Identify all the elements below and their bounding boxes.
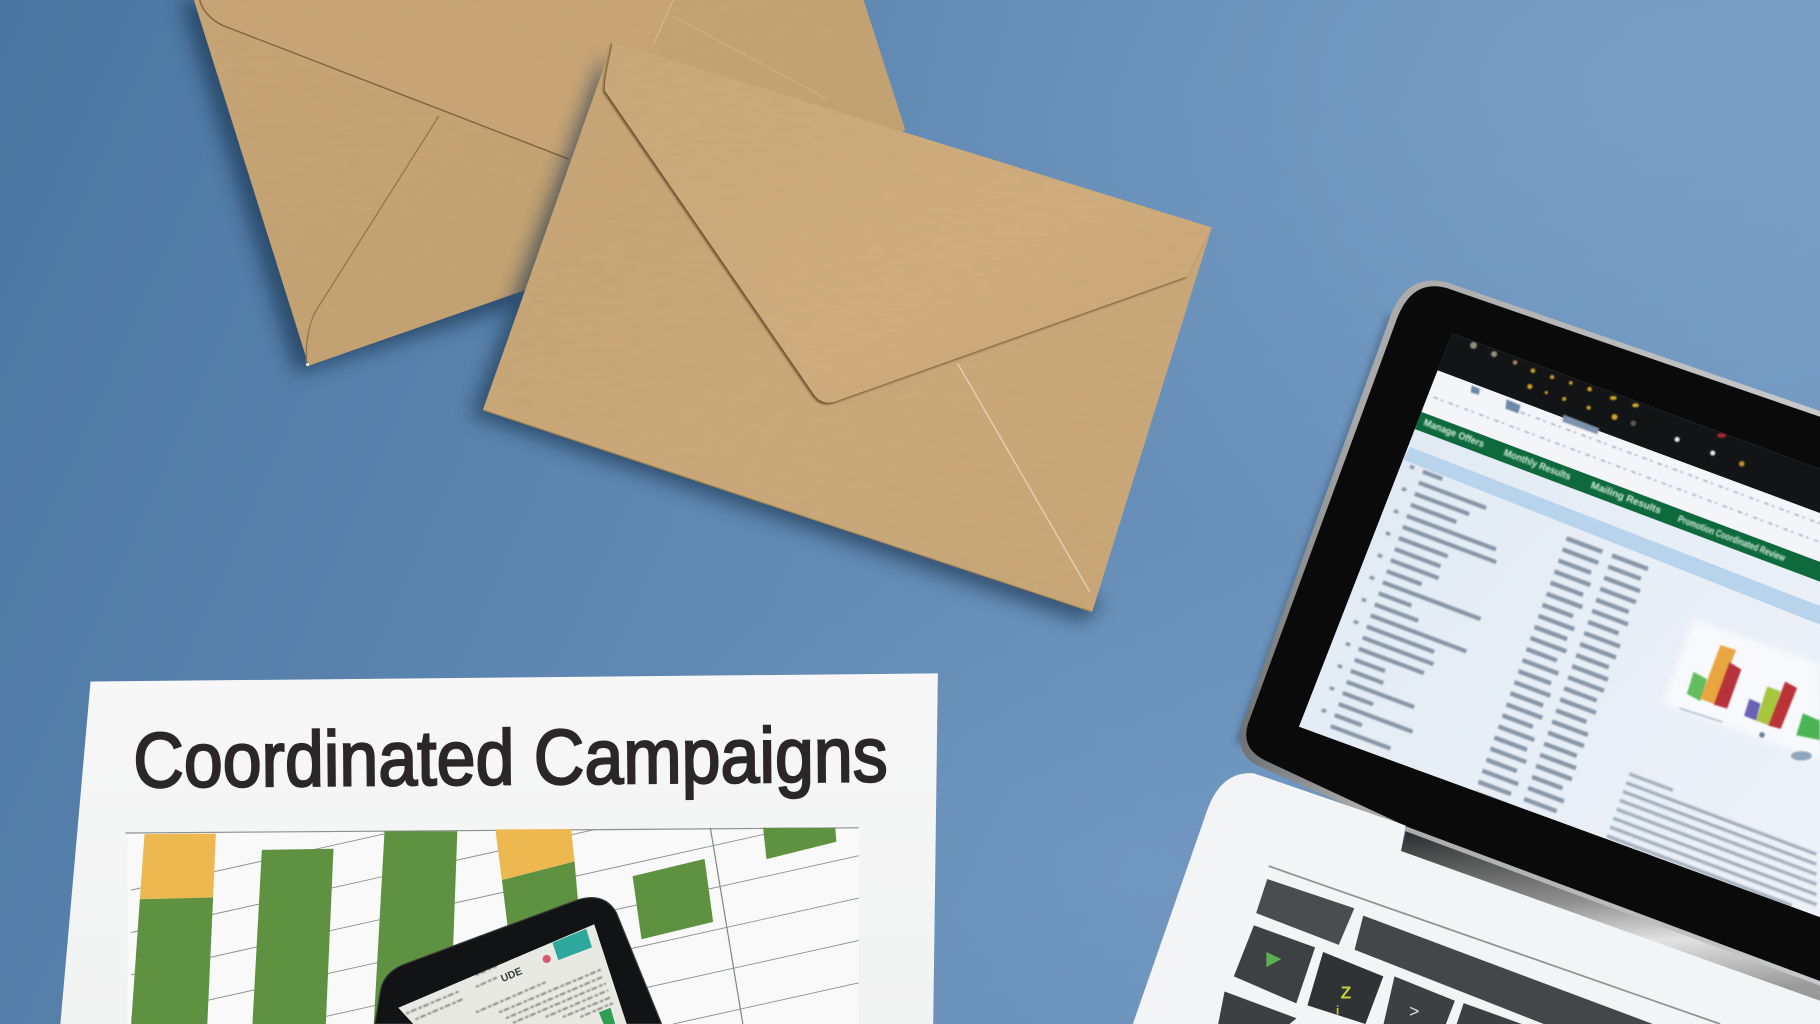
column header band	[1403, 447, 1820, 625]
ribbon	[1419, 369, 1820, 562]
back kraft envelope	[180, 0, 905, 374]
bar 1	[131, 834, 216, 1024]
phone screen: UDE	[499, 966, 524, 985]
green tab band: Mailing Results	[1589, 480, 1663, 517]
report title: Coordinated Campaigns	[133, 712, 888, 804]
hinge	[1401, 831, 1820, 1003]
key label: Z: Z	[1341, 982, 1352, 1002]
chart bars	[1680, 645, 1820, 760]
bar 4	[495, 829, 580, 952]
bar 3	[374, 831, 457, 1024]
spreadsheet rows	[1313, 465, 1820, 922]
laptop lid and bezel	[1240, 280, 1820, 987]
phone screen	[398, 924, 627, 1024]
spreadsheet screen	[1299, 333, 1820, 922]
smartphone	[375, 898, 662, 1024]
bar chart on paper	[125, 827, 859, 1024]
bar 5	[633, 859, 713, 939]
key label: arrow: >	[1409, 1001, 1419, 1021]
green tab band	[1412, 411, 1820, 582]
green tab band: Promotion Coordinated Review	[1676, 514, 1787, 564]
window toolbar	[1435, 333, 1820, 513]
keyboard keys	[1218, 879, 1653, 1024]
key label: i: i	[1336, 1005, 1339, 1018]
laptop base	[1133, 773, 1820, 1024]
bar 6	[763, 828, 836, 859]
green tab band: Manage Offers	[1422, 417, 1486, 450]
front kraft envelope	[470, 42, 1212, 622]
green tab band: Monthly Results	[1502, 448, 1573, 483]
laptop	[1133, 280, 1820, 1024]
laptop lid shadow	[1235, 313, 1393, 743]
printed report paper	[60, 673, 938, 1024]
key icon: green arrow	[1266, 952, 1281, 967]
bar 2	[252, 849, 333, 1024]
envelope flap	[603, 42, 1212, 404]
screen chart panel	[1662, 619, 1820, 760]
